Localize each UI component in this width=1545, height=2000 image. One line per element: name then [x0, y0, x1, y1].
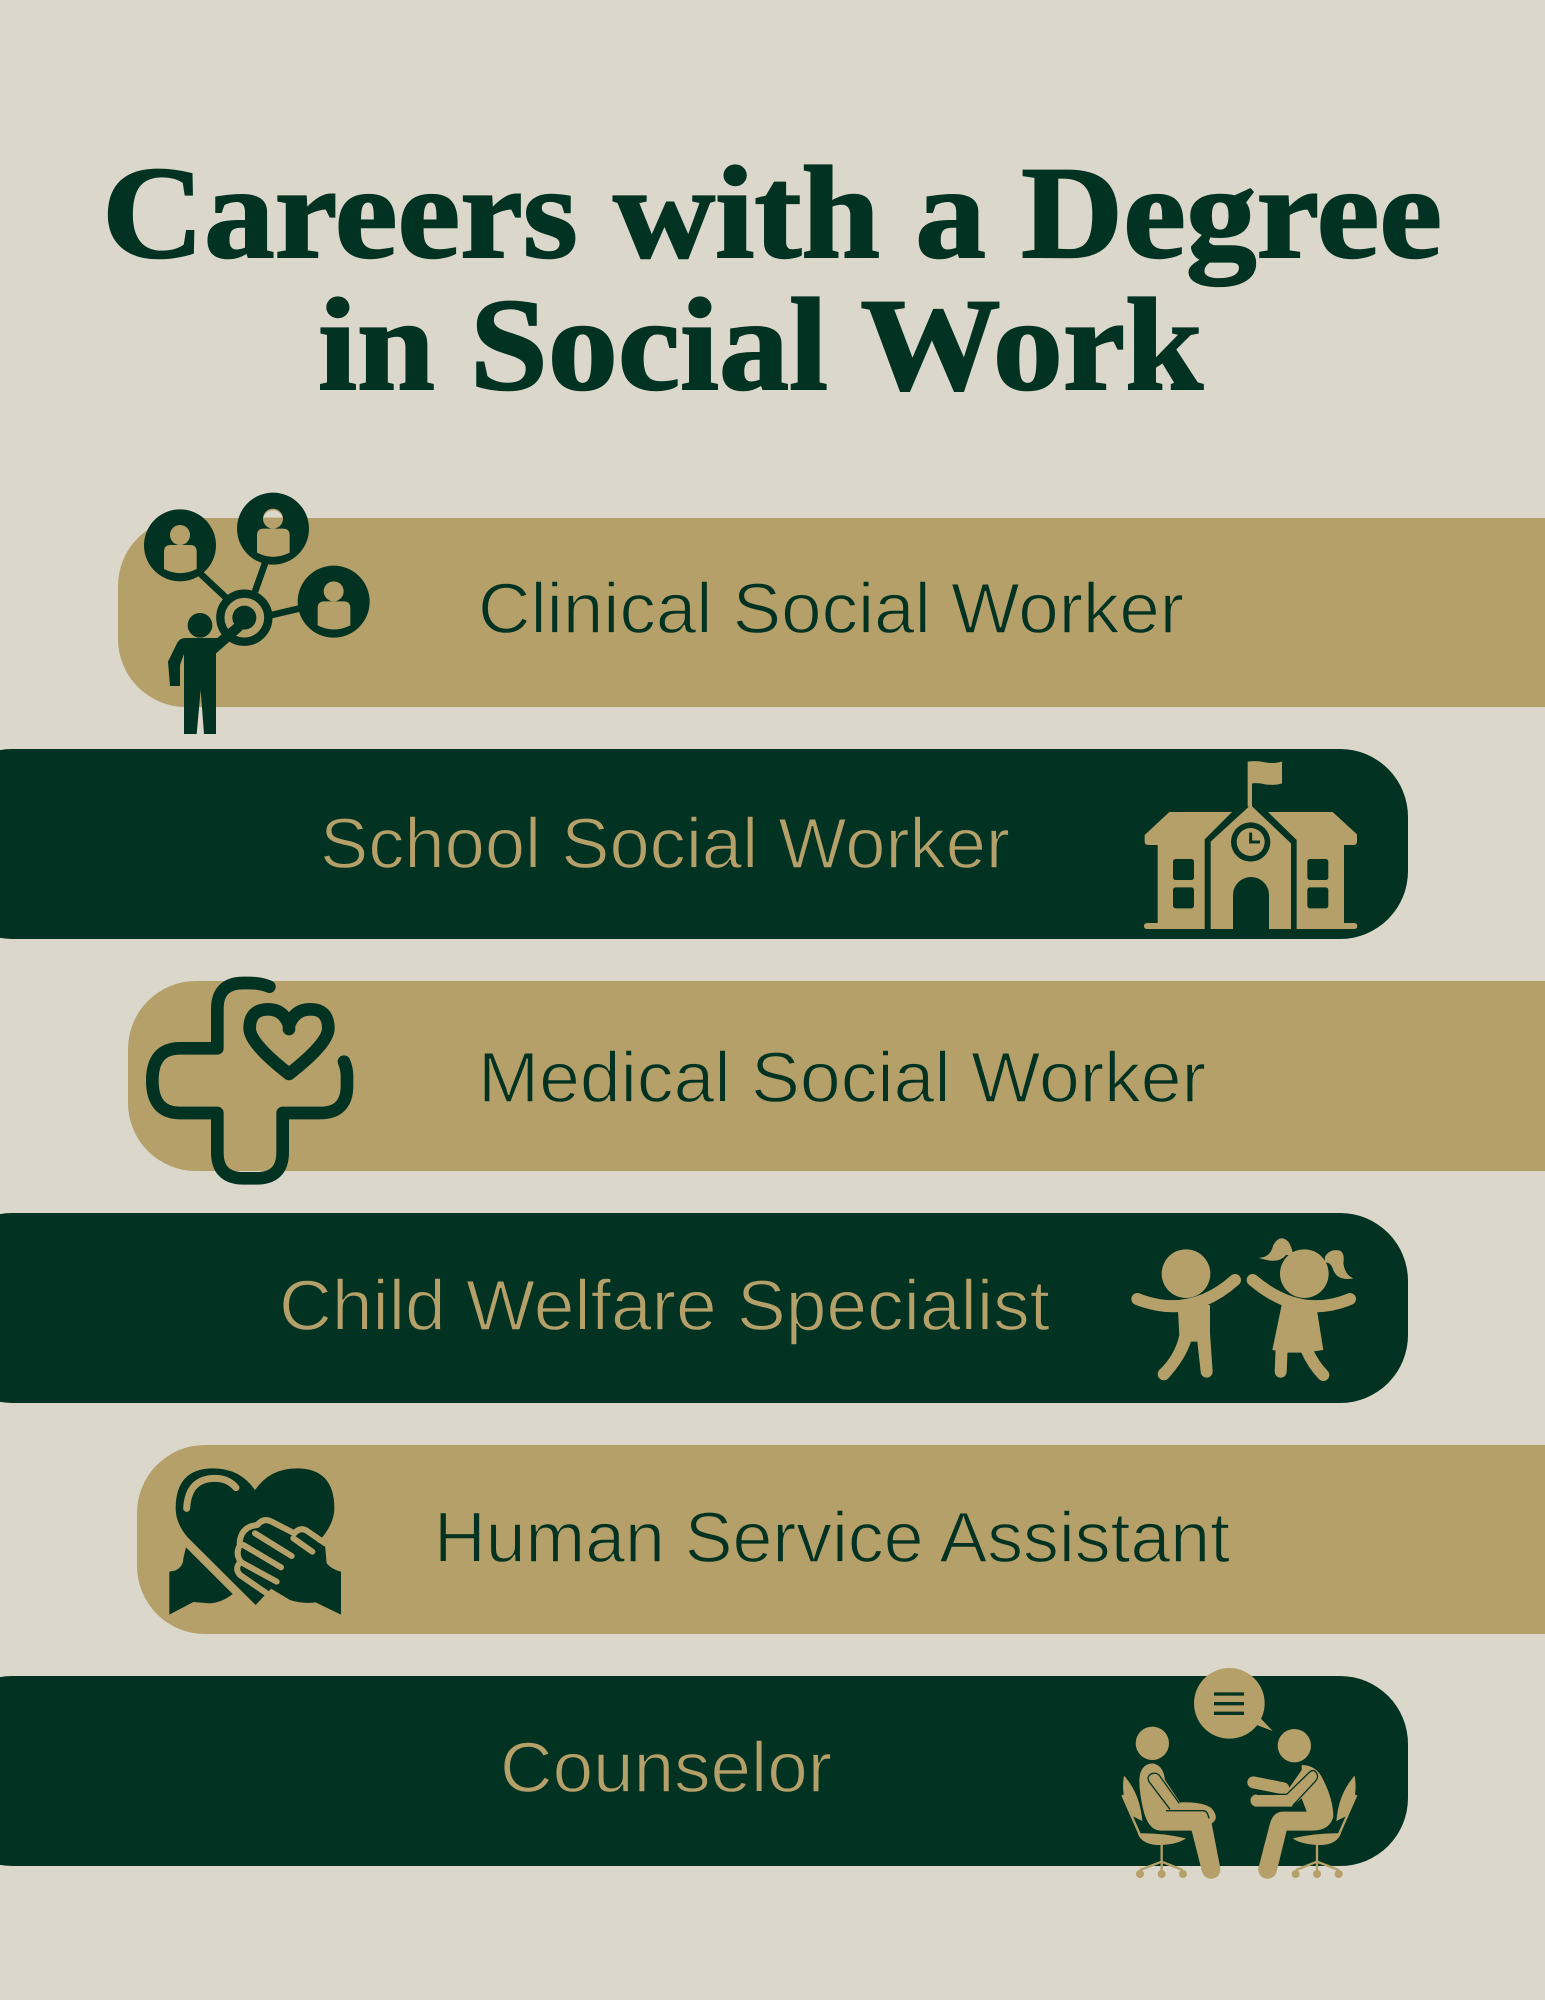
label: School Social Worker: School Social Worker — [320, 805, 1010, 884]
label: Human Service Assistant: Human Service Assistant — [434, 1499, 1230, 1578]
panel: Child Welfare Specialist — [0, 1213, 1408, 1403]
icon: hands over heart — [169, 1468, 341, 1615]
icon: person connecting to network of people — [144, 493, 370, 734]
panel: School Social Worker — [0, 749, 1408, 939]
label: Child Welfare Specialist: Child Welfare Specialist — [279, 1267, 1050, 1346]
label: Medical Social Worker: Medical Social Worker — [478, 1039, 1206, 1118]
panel: Counselor — [0, 1668, 1408, 1879]
label: Clinical Social Worker: Clinical Social Worker — [478, 570, 1184, 649]
icon: two children holding arms up — [1137, 1238, 1353, 1380]
panel: Human Service Assistant — [137, 1445, 1545, 1634]
title: Careers with a Degree — [102, 139, 1442, 286]
title — [102, 139, 1442, 418]
panel: Clinical Social Worker — [118, 493, 1545, 734]
icon: medical cross with heart — [152, 983, 347, 1178]
title: in Social Work — [318, 271, 1204, 418]
panel: Medical Social Worker — [128, 981, 1545, 1178]
icon: school building with flag and clock — [1144, 761, 1357, 929]
icon: two people talking on chairs with speech bubble — [1122, 1668, 1356, 1879]
label: Counselor: Counselor — [500, 1729, 832, 1808]
